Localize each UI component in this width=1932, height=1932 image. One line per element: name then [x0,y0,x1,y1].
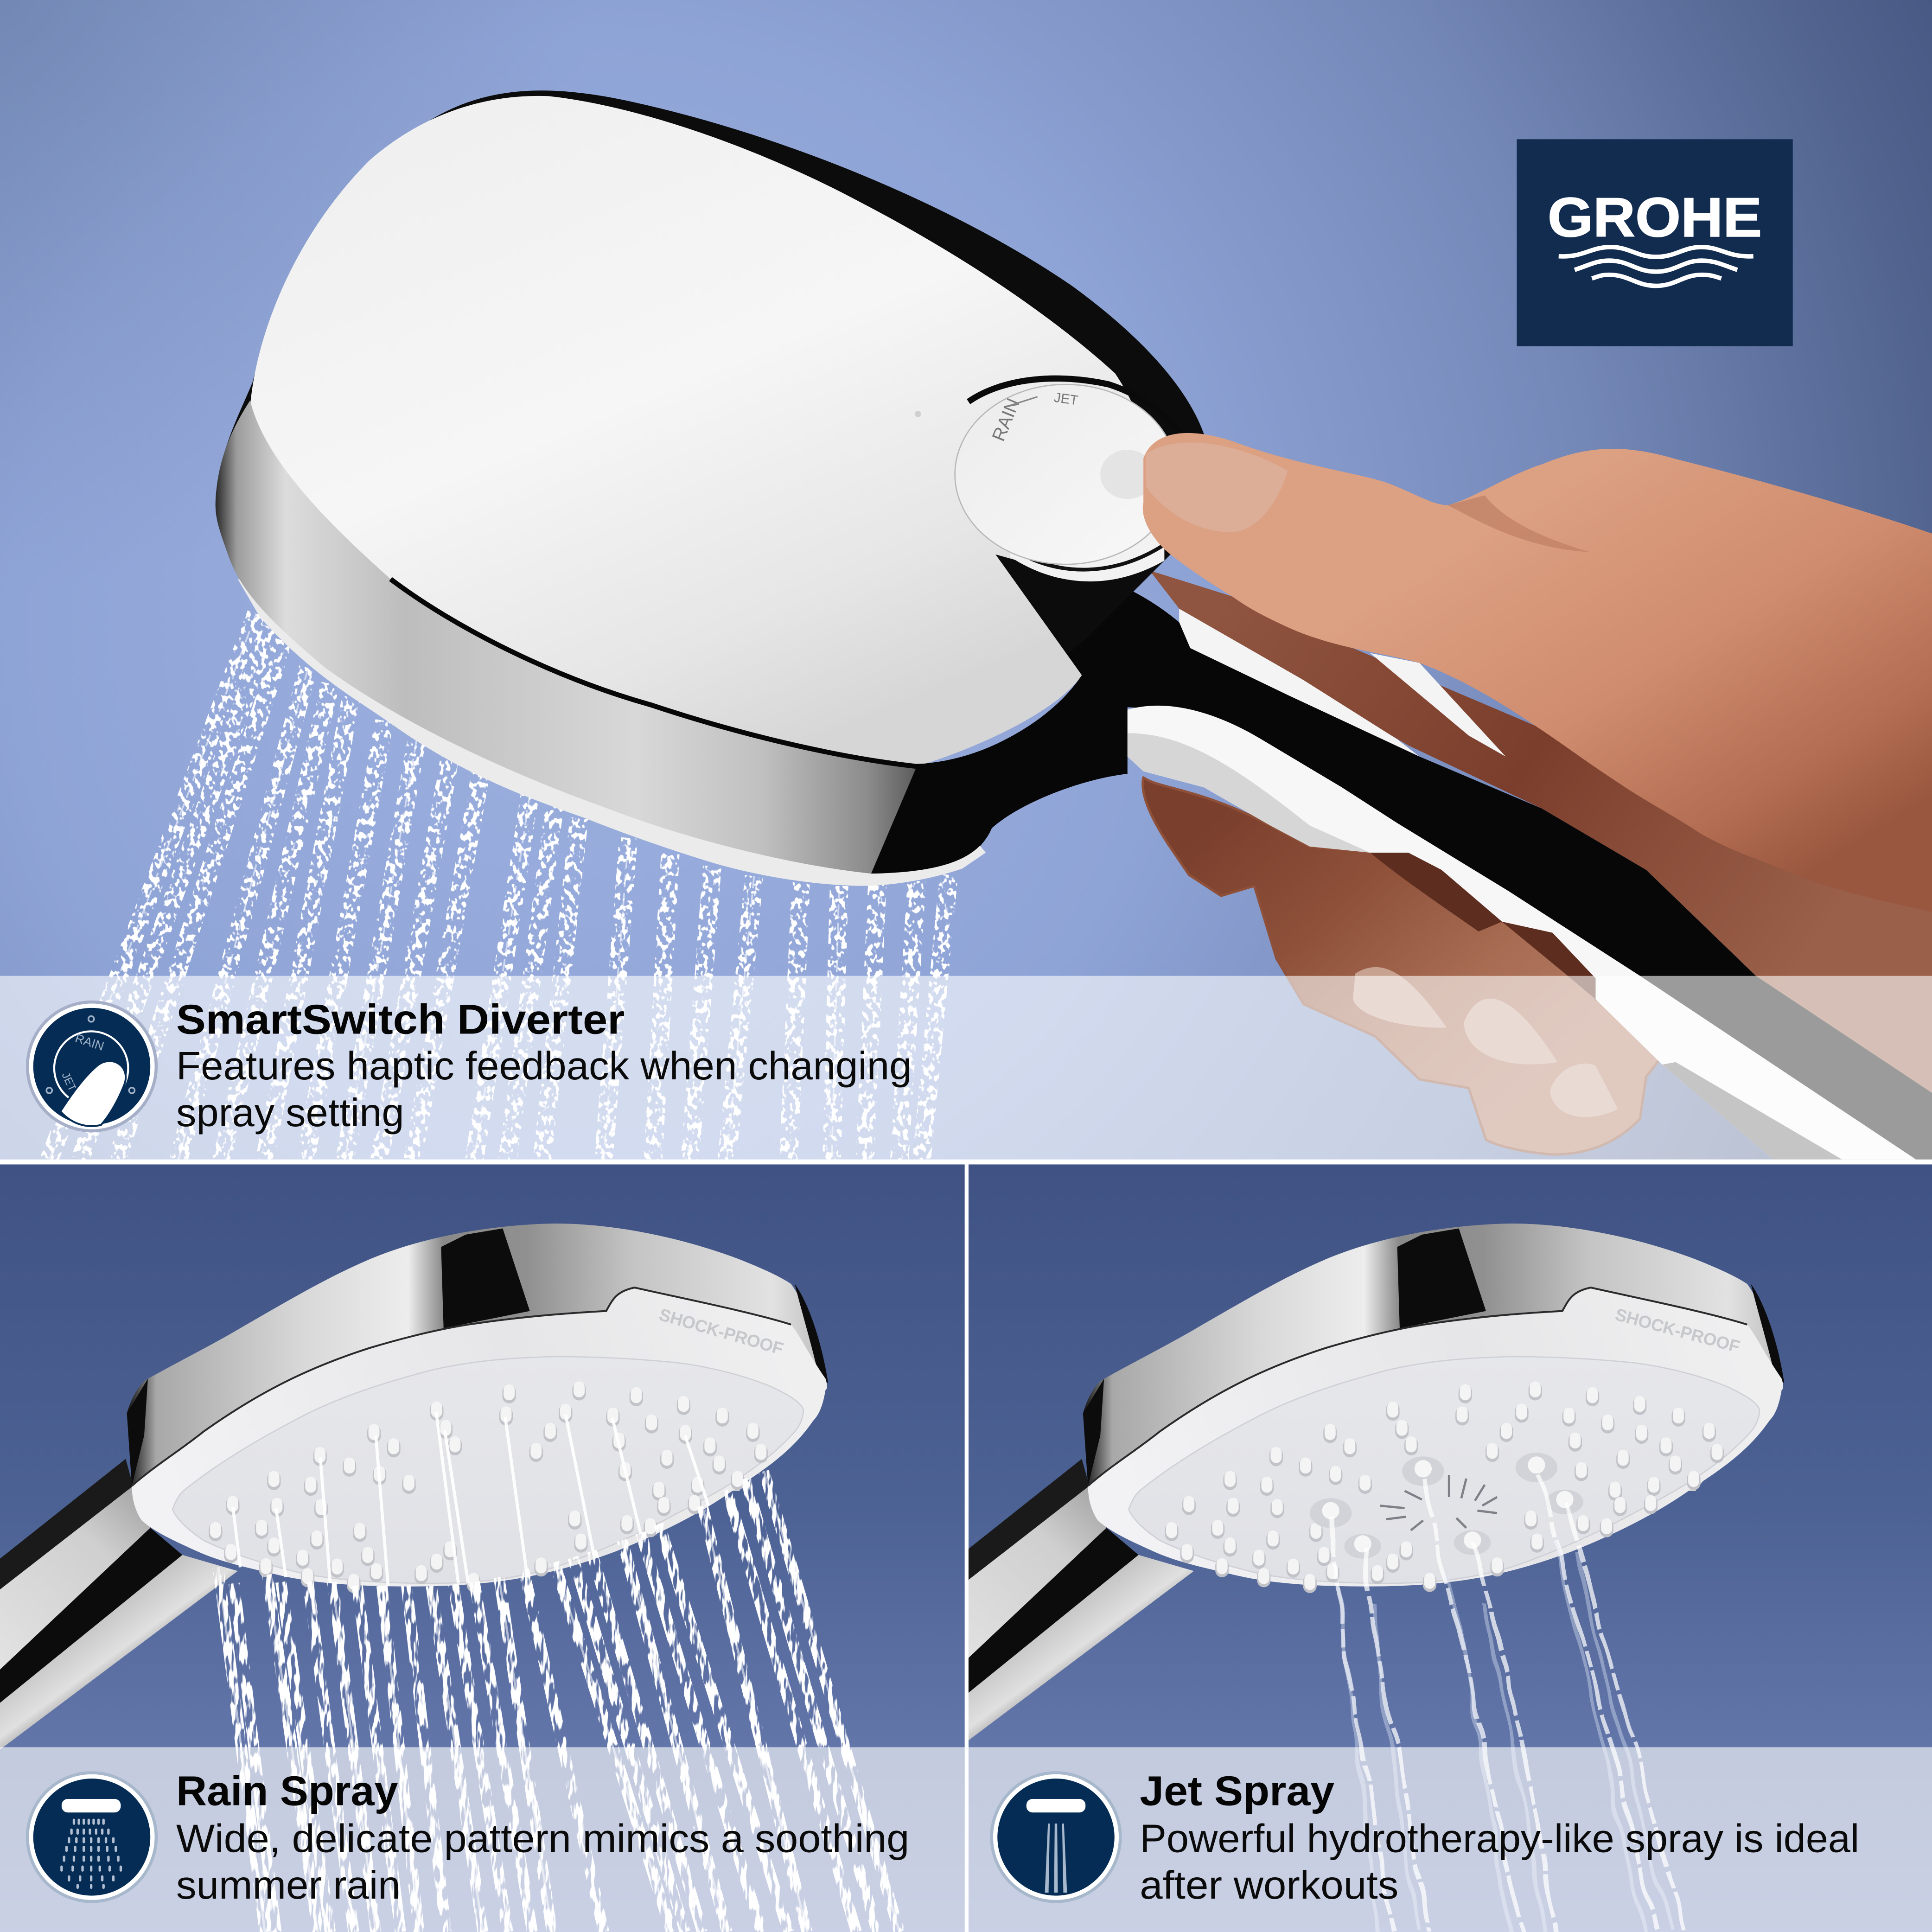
text block: Rain Spray: Rain Spray [176,1767,398,1814]
icon: rain spray [26,1771,158,1903]
icon: jet spray [990,1771,1122,1903]
fingers holding the handle [1143,778,1662,1154]
icon: SmartSwitch finger on dial: JET [59,1070,79,1094]
GROHE logo: GROHE [1548,187,1762,249]
panel: Rain Spray photo: SHOCK-PROOF [657,1305,785,1358]
SmartSwitch button with RAIN and JET labels [955,378,1180,581]
panel: SmartSwitch hero photo background [0,0,1932,1160]
text block: SmartSwitch Diverter: SmartSwitch Diverter [176,996,625,1043]
shower head body [216,90,1205,886]
GROHE logo [1517,139,1793,346]
translucent caption band: Rain Spray [0,1747,965,1932]
text block: SmartSwitch Diverter: Features haptic feedback when changing [176,1044,912,1088]
panel: Rain Spray photo [0,1164,965,1932]
panel: Jet Spray photo [956,1164,1932,1932]
text block: Jet Spray [1140,1767,1859,1907]
translucent caption band: Jet Spray [969,1747,1932,1932]
text block: SmartSwitch Diverter: spray setting [176,1091,404,1135]
text block: Jet Spray: Jet Spray [1140,1767,1334,1814]
hand shower handle [925,592,1932,1160]
index finger behind the handle [1149,570,1932,1093]
icon: SmartSwitch finger on dial: RAIN [73,1031,106,1053]
text block: SmartSwitch Diverter [176,996,912,1135]
text block: Rain Spray [176,1767,909,1907]
text block: Jet Spray: after workouts [1140,1863,1398,1907]
SmartSwitch button with RAIN and JET labels: JET [1053,390,1079,408]
hand with thumb pressing the button [1143,433,1932,912]
panel: Jet Spray photo: SHOCK-PROOF [1613,1304,1742,1356]
vertical divider [965,1164,969,1932]
translucent caption band: SmartSwitch Diverter [0,976,1932,1160]
text block: Jet Spray: Powerful hydrotherapy-like spray is ideal [1140,1817,1859,1861]
SmartSwitch button with RAIN and JET labels: RAIN [988,395,1024,444]
icon: SmartSwitch finger on dial [26,1001,158,1132]
text block: Rain Spray: summer rain [176,1863,401,1907]
water spray from hand shower [41,610,957,1160]
divider and page gutters [0,1160,1932,1164]
text block: Rain Spray: Wide, delicate pattern mimics a soothing [176,1817,909,1861]
